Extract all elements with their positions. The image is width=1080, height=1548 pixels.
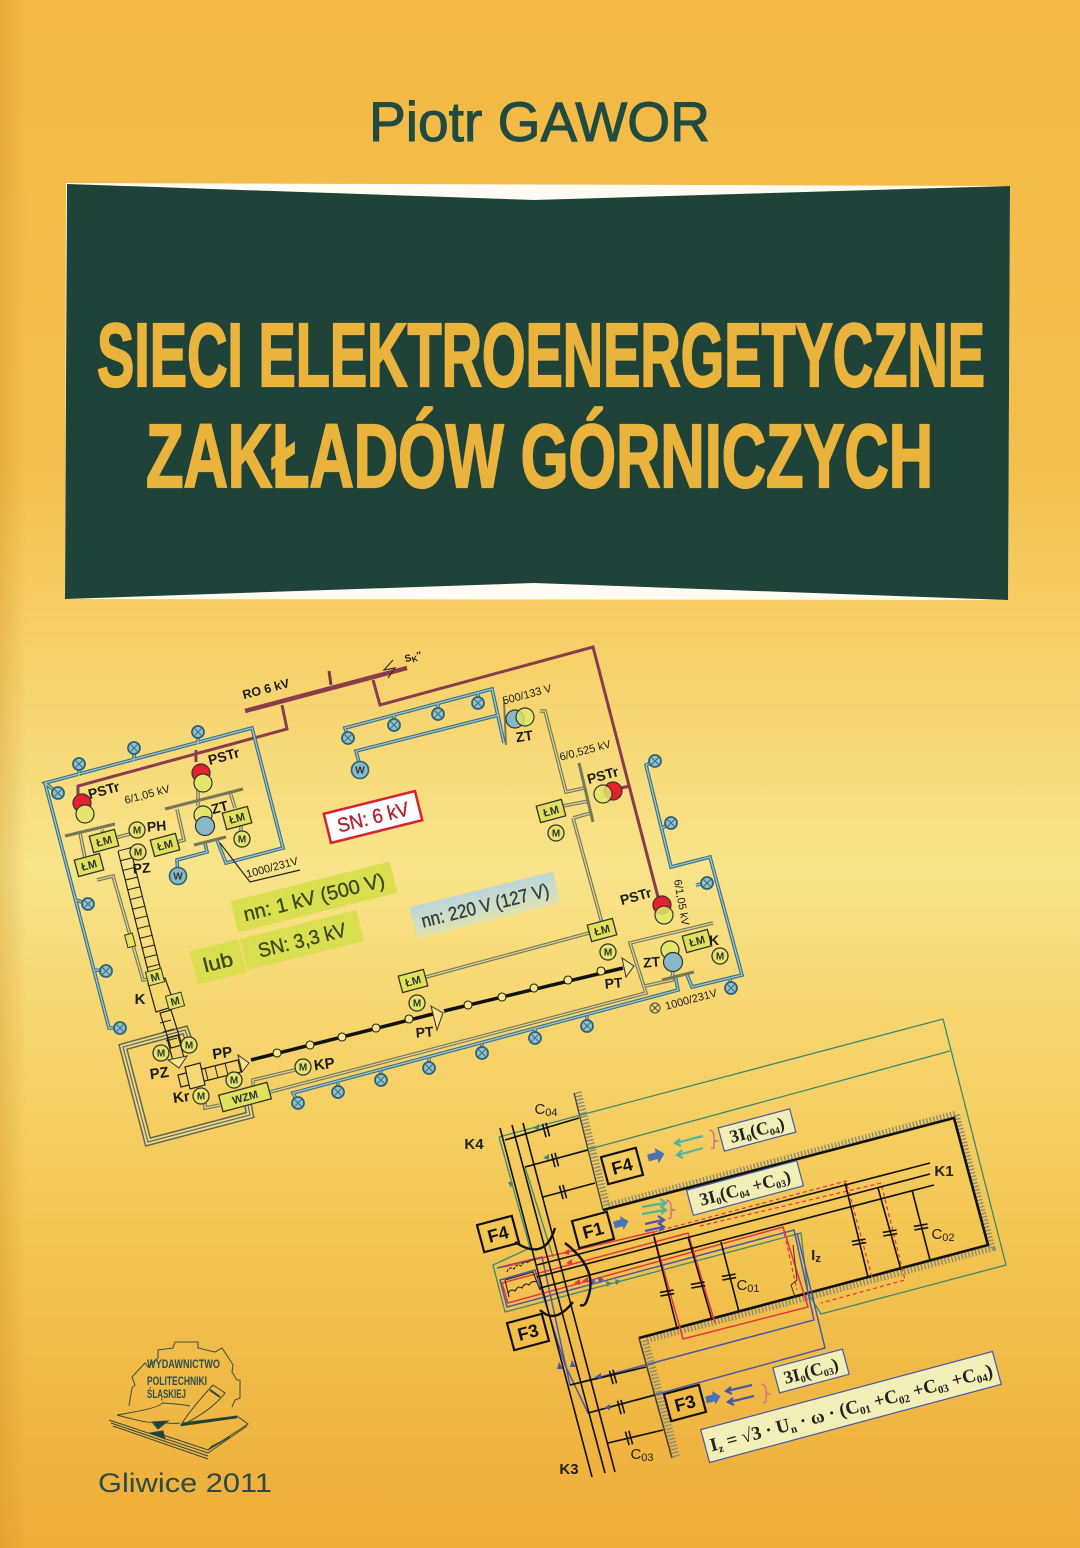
formula box: fault current: +C: [867, 1386, 901, 1414]
motors: W: [355, 766, 365, 776]
diagram labels: Kr: [172, 1088, 191, 1107]
formula box: 3I0(C03): 0: [800, 1374, 807, 1386]
F relay boxes: F1: [580, 1218, 606, 1243]
voltage label: SN 3,3 kV: [240, 910, 364, 970]
diagram labels: PP: [211, 1044, 233, 1063]
formula box: fault current: 04: [976, 1372, 990, 1386]
diagram labels: PSTr: [206, 744, 242, 768]
contactor boxes: ŁM: [593, 923, 611, 939]
formula box: 3I0(C04): (C: [748, 1117, 771, 1142]
publisher name: WYDAWNICTWO: [147, 1357, 220, 1371]
formula box: 3I0(C04+C03): ): [782, 1166, 793, 1188]
cable and capacitor labels: 03: [641, 1452, 654, 1464]
motors: M: [133, 826, 141, 836]
signal arrows: [612, 1136, 754, 1407]
green current paths: [493, 1019, 1006, 1314]
dashed red current paths: [654, 1181, 905, 1303]
author name: Piotr GAWOR: [369, 90, 710, 153]
purple current paths: [497, 1230, 825, 1413]
diagram labels: PSTr: [618, 884, 654, 908]
formula box: 3I0(C04+C03): [687, 1161, 803, 1215]
diagram labels: 6/1,05 kV: [671, 879, 691, 927]
cable K1: [537, 1163, 934, 1328]
formula box: fault current: 02: [898, 1393, 912, 1407]
diagram labels: [86, 650, 719, 1107]
capacitors: [542, 1123, 928, 1445]
publisher name: POLITECHNIKI: [147, 1374, 207, 1388]
F relay boxes: F3: [672, 1391, 698, 1416]
coal conveyors: [118, 847, 634, 1089]
red current paths: [502, 1227, 808, 1339]
publisher name: ŚLĄSKIEJ: [147, 1386, 186, 1401]
contactor boxes: M: [169, 995, 181, 1009]
publisher name: [147, 1357, 220, 1401]
formula box: 3I0(C04+C03): +C: [745, 1170, 777, 1197]
formula box: fault current: I: [708, 1434, 720, 1456]
formula box: 3I0(C03): (C: [802, 1358, 825, 1383]
contactor boxes: ŁM: [228, 811, 246, 827]
diagram labels: ZT: [642, 953, 661, 971]
diagram labels: KP: [313, 1055, 336, 1074]
diagram labels: S: [404, 653, 413, 665]
fault symbol: [791, 1245, 797, 1297]
formula box: fault current: +C: [945, 1365, 978, 1393]
diagram labels: PSTr: [86, 778, 122, 802]
earth fault diagram: [464, 1019, 1006, 1478]
current direction markers: [508, 1124, 621, 1410]
diagram labels: K: [411, 654, 419, 664]
formula box: 3I0(C04+C03): (C: [717, 1180, 741, 1205]
contactor boxes: M: [149, 971, 161, 985]
contactor boxes: [74, 799, 712, 1112]
motors: M: [134, 848, 142, 858]
cable and capacitor labels: C: [630, 1446, 641, 1463]
motors: [129, 762, 728, 1104]
cable and capacitor labels: 04: [545, 1107, 558, 1119]
motors: M: [552, 828, 560, 840]
cable and capacitor labels: z: [815, 1253, 821, 1265]
cable routes blue: [45, 689, 742, 1103]
diagram labels: 1000/231V: [664, 987, 719, 1013]
voltage label: nn 1 kV: [231, 862, 397, 932]
formula box: 3I0(C03): [773, 1349, 849, 1393]
diagram labels: K: [135, 991, 146, 1008]
formula box: fault current: z: [717, 1443, 725, 1455]
formula box: fault current: = √3 · U: [719, 1415, 793, 1453]
cable and capacitor labels: K3: [559, 1461, 579, 1478]
formula box: 3I0(C04+C03): 3I: [697, 1186, 718, 1210]
diagram labels: ZT: [209, 797, 230, 817]
F relay boxes: F4: [609, 1154, 635, 1179]
contactor boxes: ŁM: [80, 858, 98, 874]
motors: M: [716, 952, 724, 962]
formula box: fault current: n: [789, 1423, 799, 1436]
F relay boxes: F4: [485, 1222, 511, 1247]
medium voltage red lines: [78, 647, 658, 897]
voltage label: SN 6 kV: SN: 6 kV: [335, 798, 412, 837]
formula box: 3I0(C04): ): [776, 1113, 787, 1135]
contactor boxes: WZM: [231, 1089, 259, 1107]
diagram labels: 1000/231V: [245, 855, 300, 881]
formula box: 3I0(C04): [718, 1109, 796, 1151]
voltage label: lub: [190, 939, 246, 985]
lamps: [52, 697, 737, 1109]
motors: M: [197, 1092, 205, 1102]
diagram labels: K: [709, 932, 719, 948]
F relay boxes: F3: [515, 1320, 541, 1345]
cable routes tan: [80, 711, 713, 1108]
transformers: [73, 708, 682, 972]
cable and capacitor labels: C: [534, 1101, 545, 1118]
F relay boxes: [477, 1148, 706, 1421]
voltage label: lub: lub: [201, 949, 235, 977]
voltage label: nn 220 V: nn: 220 V (127 V): [419, 880, 551, 932]
voltage label: nn 1 kV: nn: 1 kV (500 V): [241, 870, 387, 926]
formula box: fault current: · ω · (C: [793, 1396, 862, 1434]
formula box: fault current: ): [984, 1361, 995, 1382]
diagram labels: RO 6 kV: [241, 676, 292, 702]
contactor boxes: ŁM: [542, 804, 560, 820]
motors: M: [185, 1040, 193, 1052]
formula box: fault current: [701, 1351, 1001, 1463]
formula box: 3I0(C03): ): [830, 1354, 841, 1376]
title text: [97, 306, 985, 507]
diagram labels: 6/0,525 kV: [558, 738, 613, 764]
cable and capacitor labels: 02: [942, 1232, 955, 1244]
triple cable frame: [123, 1030, 250, 1142]
gallery walls with hatching: [574, 1092, 992, 1458]
open book and pen: [109, 1385, 248, 1459]
cable and capacitor labels: I: [811, 1247, 815, 1264]
formula box: fault current: 03: [937, 1382, 951, 1397]
place and year: Gliwice 2011: [98, 1468, 272, 1498]
formula box: 3I0(C04+C03): 04: [739, 1188, 751, 1201]
diagram labels: '': [416, 650, 423, 662]
formula labels: [687, 1109, 1001, 1463]
motors: M: [604, 948, 612, 958]
diagram labels: PT: [415, 1023, 435, 1041]
coil transformer: [505, 1259, 540, 1297]
mine network diagram: [45, 647, 742, 1142]
busbars: [65, 700, 694, 980]
contactor boxes: ŁM: [95, 834, 113, 850]
motors: W: [173, 872, 183, 882]
formula box: 3I0(C03): 03: [823, 1366, 835, 1379]
voltage label: SN 3,3 kV: SN: 3,3 kV: [256, 919, 349, 963]
formula box: fault current: +C: [906, 1375, 940, 1403]
diagram labels: PH: [146, 817, 167, 835]
diagram labels: 6/1,05 kV: [123, 783, 172, 807]
motors: M: [230, 1076, 238, 1086]
cable and capacitor labels: C: [931, 1226, 942, 1243]
motors: M: [157, 1048, 165, 1060]
title panel: [65, 183, 1010, 600]
motors: M: [238, 834, 246, 846]
contactor boxes: ŁM: [688, 934, 706, 950]
formula box: 3I0(C04): 0: [746, 1133, 753, 1145]
fault leader lines: [220, 843, 300, 882]
cable and capacitor labels: K1: [934, 1163, 954, 1180]
formula box: 3I0(C04+C03): 0: [715, 1196, 723, 1208]
diagram labels: PZ: [132, 859, 152, 877]
cable and capacitor labels: [464, 1101, 955, 1478]
formula box: 3I0(C04): 04: [769, 1125, 781, 1138]
contactor boxes: ŁM: [404, 974, 422, 990]
formula box: fault current: 01: [859, 1403, 873, 1418]
motors: M: [299, 1062, 307, 1074]
cable and capacitor labels: C: [736, 1277, 747, 1294]
cable and capacitor labels: K4: [464, 1136, 484, 1153]
contactor boxes: ŁM: [156, 838, 174, 854]
formula box: 3I0(C04+C03): 03: [775, 1178, 788, 1192]
diagram labels: PT: [604, 974, 624, 992]
voltage label: SN 6 kV: [324, 791, 422, 843]
formula box: 3I0(C04): 3I: [727, 1123, 748, 1147]
publisher logo: [109, 1342, 248, 1459]
diagram labels: PSTr: [585, 763, 621, 787]
formula box: 3I0(C03): 3I: [781, 1364, 802, 1388]
cable and capacitor labels: 01: [747, 1283, 760, 1295]
cables K3 K4: [500, 1118, 663, 1477]
diagram labels: PZ: [149, 1064, 170, 1083]
pink brackets: [666, 1130, 769, 1403]
diagram labels: ZT: [515, 727, 534, 745]
gear outline: [129, 1342, 240, 1407]
diagram labels: 500/133 V: [501, 683, 554, 707]
current transformer loops: [515, 1228, 591, 1316]
motors: M: [413, 998, 421, 1010]
